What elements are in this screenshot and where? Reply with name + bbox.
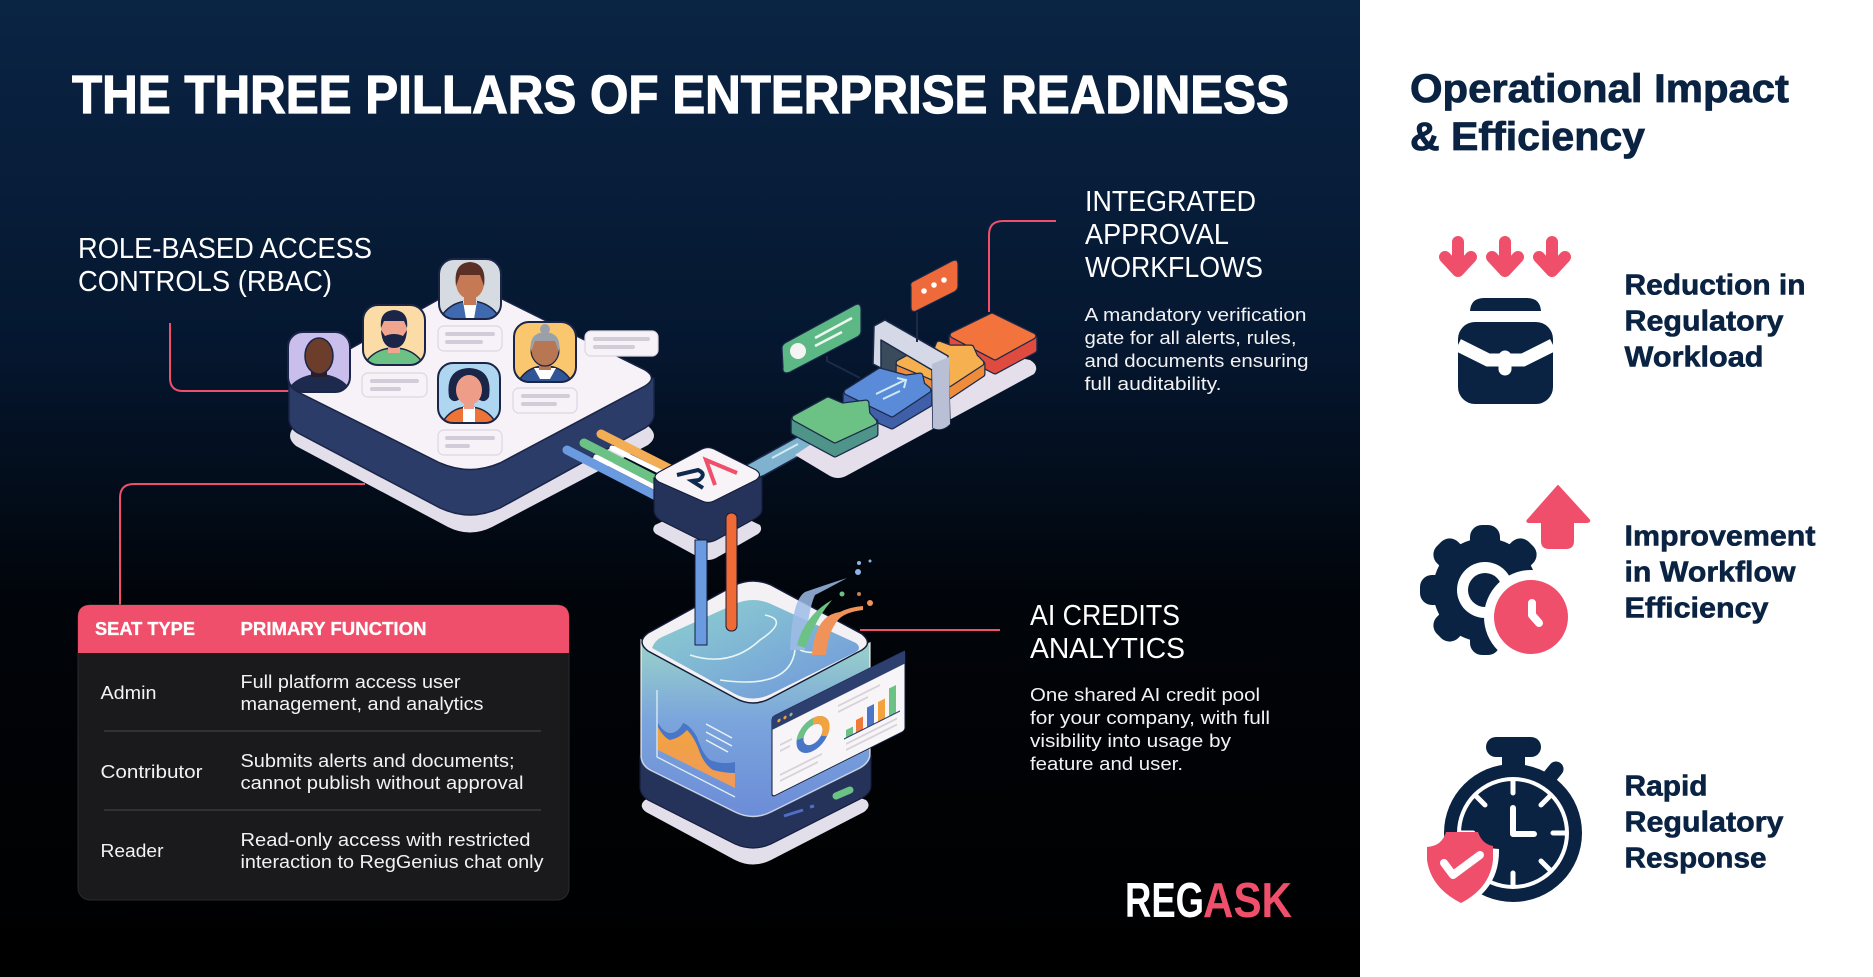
icon: gear with clock and up arrow	[1420, 486, 1589, 664]
callout: integrated approval workflows: INTEGRATED	[1085, 186, 1256, 218]
illustration: RBAC platform	[286, 259, 658, 532]
tank base slab	[642, 760, 869, 864]
text: reduction in regulatory workload	[1624, 270, 1806, 374]
callout: AI credits analytics: for your company, with full	[1030, 708, 1270, 728]
right panel heading: & Efficiency	[1410, 115, 1646, 159]
text: rapid regulatory response: Regulatory	[1624, 806, 1784, 838]
donut chart	[800, 715, 826, 754]
red-orange tile	[952, 316, 1034, 371]
callout: RBAC heading: CONTROLS (RBAC)	[78, 266, 332, 298]
callout: RBAC heading: ROLE-BASED ACCESS	[78, 233, 372, 265]
callout: AI credits analytics: ANALYTICS	[1030, 633, 1185, 665]
yellow tile	[899, 344, 982, 396]
row: admin: management, and analytics	[240, 694, 484, 714]
right panel heading	[1410, 67, 1789, 159]
tank glass	[641, 640, 870, 816]
connector: tank to AI heading	[860, 629, 1000, 631]
callout: RBAC heading	[78, 233, 372, 298]
analytics dashboard	[772, 650, 905, 797]
callout: AI credits analytics: feature and user.	[1030, 754, 1183, 774]
glass side chart	[657, 690, 735, 797]
text: improvement in workflow efficiency: Improvement	[1624, 520, 1816, 552]
label cards	[362, 326, 658, 455]
back of gate	[880, 336, 930, 400]
workflow base	[795, 356, 1036, 478]
feed pipes	[695, 540, 707, 645]
text: rapid regulatory response	[1624, 770, 1784, 874]
hub navy side	[654, 476, 762, 542]
row: reader	[100, 830, 544, 872]
row: reader: Read-only access with restricted	[240, 830, 530, 850]
icon: briefcase with down arrows	[1445, 242, 1565, 404]
avatar: blue	[437, 362, 501, 424]
text: reduction in regulatory workload: Regulatory	[1624, 306, 1784, 338]
connector: platform to table	[120, 484, 365, 606]
hub top	[655, 448, 760, 502]
illustration: central hub	[653, 448, 762, 560]
text: reduction in regulatory workload: Reduction in	[1624, 270, 1806, 302]
row: reader: Reader	[100, 841, 164, 861]
callout: integrated approval workflows: APPROVAL	[1085, 219, 1229, 251]
water surface	[652, 600, 859, 698]
text: improvement in workflow efficiency: Efficiency	[1624, 592, 1768, 624]
avatar: purple	[287, 331, 351, 393]
callout: integrated approval workflows: gate for all alerts, rules,	[1084, 328, 1296, 348]
connector: RBAC heading to platform	[170, 323, 291, 391]
table header	[78, 605, 569, 653]
dark background panel	[0, 0, 1360, 977]
avatar: peach	[362, 304, 426, 366]
platform navy side	[289, 378, 654, 515]
right panel heading: Operational Impact	[1410, 67, 1789, 111]
tank rim	[642, 581, 868, 703]
callout: AI credits analytics: One shared AI credit pool	[1030, 685, 1260, 705]
callout: integrated approval workflows: and documents ensuring	[1084, 351, 1308, 371]
avatar: orange	[513, 321, 577, 383]
row: contributor: cannot publish without approval	[240, 773, 524, 793]
bar chart	[844, 683, 900, 739]
row: admin: Admin	[100, 683, 156, 703]
seat type table: PRIMARY FUNCTION	[240, 619, 426, 639]
illustration: approval workflow	[782, 260, 1036, 478]
hub logo mark	[677, 460, 737, 488]
tank navy base	[640, 756, 871, 848]
callout: integrated approval workflows: full auditability.	[1084, 374, 1222, 394]
hub base	[653, 500, 761, 560]
logo: ASK	[1203, 874, 1292, 928]
green tile	[794, 400, 875, 454]
orange status bubble	[911, 260, 958, 312]
row: reader: interaction to RegGenius chat only	[240, 852, 544, 872]
row: contributor: Contributor	[100, 762, 203, 782]
seat type table	[78, 605, 569, 900]
platform top face	[292, 288, 652, 470]
data wisps	[790, 578, 863, 655]
white right panel	[1360, 0, 1873, 977]
blue tile	[846, 371, 929, 426]
text: reduction in regulatory workload: Workload	[1624, 342, 1764, 374]
icon: stopwatch with shield	[1423, 737, 1582, 908]
platform base slab	[290, 425, 654, 532]
connector: workflow to heading	[989, 221, 1056, 312]
text: rapid regulatory response: Response	[1624, 842, 1766, 874]
callout: AI credits analytics: AI CREDITS	[1030, 600, 1180, 632]
logo	[1125, 874, 1292, 928]
row: admin: Full platform access user	[240, 672, 460, 692]
data connectors to hub	[567, 434, 672, 498]
row: contributor	[100, 751, 524, 793]
green message bubble	[782, 304, 861, 373]
callout: integrated approval workflows: WORKFLOWS	[1085, 252, 1263, 284]
callout: integrated approval workflows	[1084, 186, 1308, 394]
pipe to workflow	[752, 441, 808, 472]
callout: integrated approval workflows: A mandatory verification	[1084, 305, 1306, 325]
callout: AI credits analytics: visibility into usage by	[1030, 731, 1231, 751]
avatar: grey	[438, 258, 502, 320]
verification gate	[873, 320, 950, 429]
illustration: AI credits tank	[640, 513, 905, 864]
text: improvement in workflow efficiency	[1624, 520, 1816, 624]
text: improvement in workflow efficiency: in Workflow	[1624, 556, 1796, 588]
row: admin	[100, 672, 484, 714]
text: rapid regulatory response: Rapid	[1624, 770, 1708, 802]
logo: REG	[1125, 874, 1204, 928]
row: contributor: Submits alerts and documents;	[240, 751, 514, 771]
seat type table: SEAT TYPE	[95, 619, 195, 639]
title: THE THREE PILLARS OF ENTERPRISE READINESS	[72, 65, 1289, 125]
callout: AI credits analytics	[1030, 600, 1270, 774]
